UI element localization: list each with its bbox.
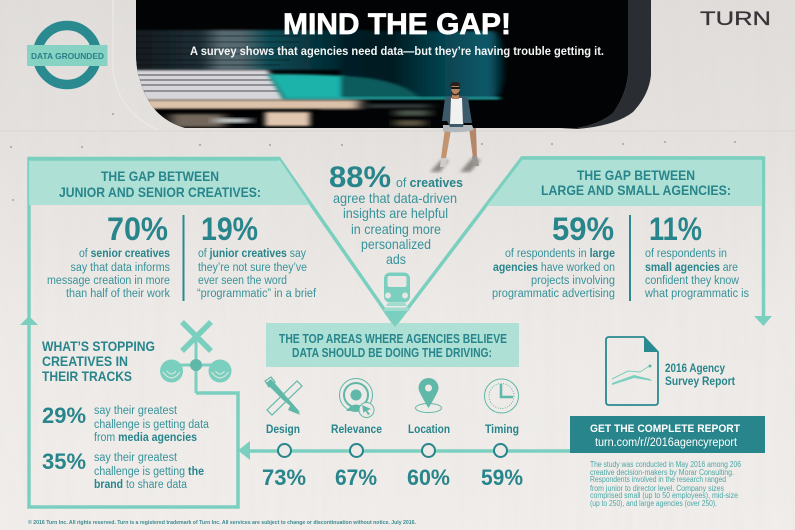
column: location 60%: Location (408, 424, 450, 436)
stat: 70% senior creatives (47, 211, 170, 300)
stat: 70% senior creatives: message creation in more (47, 275, 170, 287)
callout: 88% of creatives: insights are helpful (343, 205, 448, 221)
callout: get the complete report (570, 416, 765, 453)
panel heading (59, 168, 261, 200)
column: relevance 67%: 67% (335, 465, 377, 490)
panel heading: CREATIVES IN (42, 353, 128, 369)
logo: data grounded roundel (27, 26, 108, 84)
callout: 88% of creatives: personalized (361, 236, 431, 252)
stat: 35% the brand: say their greatest (94, 452, 178, 464)
panel heading: THE GAP BETWEEN (577, 167, 695, 183)
panel heading: THEIR TRACKS (42, 368, 132, 384)
callout: 88% of creatives: agree that data-driven (333, 190, 457, 206)
title: MIND THE GAP! (283, 8, 511, 41)
stat: 35% the brand (42, 449, 204, 491)
stat: 11% small agencies: of respondents in (645, 248, 727, 260)
panel heading: WHAT’S STOPPING (42, 338, 155, 354)
stat: 59% large agencies: 59% (552, 211, 614, 247)
subtitle: A survey shows that agencies need data—but they’re having trouble getting it. (190, 44, 604, 58)
stat: 11% small agencies: confident they know (645, 275, 740, 287)
stat: 19% junior creatives: they’re not sure they’ve (198, 262, 307, 274)
stat: 29% media agencies: say their greatest (94, 405, 178, 417)
stat: 35% the brand: brand to share data (94, 479, 188, 491)
column: design 73%: Design (266, 424, 300, 436)
stat: 19% junior creatives: of junior creatives say (198, 248, 306, 260)
callout: 88% of creatives (329, 161, 463, 267)
icon: railroad crossing signal (160, 322, 232, 393)
icon: train (383, 272, 410, 311)
photo: train passing through window (130, 0, 651, 130)
stat: 70% senior creatives: of senior creatives (79, 248, 170, 260)
stat: 59% large agencies (492, 211, 615, 300)
panel heading (541, 167, 731, 198)
callout: get the complete report: turn.com/r//2016agencyreport (595, 437, 738, 449)
stat: 59% large agencies: of respondents in large (505, 248, 615, 260)
stat: 35% the brand: 35% (42, 449, 86, 474)
panel heading (42, 338, 155, 384)
callout: get the complete report: GET THE COMPLETE REPORT (590, 423, 740, 435)
stat: 70% senior creatives: than half of their work (66, 288, 170, 300)
column: relevance 67% (331, 378, 382, 490)
study methodology note: The study was conducted in May 2016 among 206 (590, 460, 741, 469)
callout: 88% of creatives: in creating more (351, 221, 441, 237)
stat: 59% large agencies: programmatic advertising (492, 288, 615, 300)
stat: 19% junior creatives: ever seen the word (198, 275, 287, 287)
stat: 11% small agencies: what programmatic is (644, 288, 749, 300)
callout: 88% of creatives: ads (386, 251, 406, 267)
report label: 2016 Agency (665, 363, 726, 375)
stat: 70% senior creatives: 70% (107, 211, 168, 247)
roundel label: DATA GROUNDED (31, 51, 104, 61)
report label (665, 363, 735, 388)
panel: top areas heading: DATA SHOULD BE DOING THE DRIVING: (292, 346, 492, 360)
column: relevance 67%: Relevance (331, 424, 382, 436)
study methodology note: (up to 250), and large agencies (over 250). (590, 499, 717, 508)
panel: large and small agencies (492, 167, 749, 301)
man sitting on the ledge (430, 82, 481, 172)
column: design 73% (262, 377, 306, 490)
panel: top areas heading (266, 311, 519, 367)
stat: 59% large agencies: projects involving (531, 275, 615, 287)
column: timing 59%: 59% (481, 465, 523, 490)
footer copyright: © 2016 Turn Inc. All rights reserved. Turn is a registered trademark of Turn Inc. All services are subject to change or discontinuation without notice. July 2016. (28, 519, 417, 526)
stat: 11% small agencies (644, 211, 749, 300)
logo: Turn: TURN (700, 8, 771, 30)
stat: 29% media agencies (42, 403, 210, 444)
stat: 19% junior creatives: “programmatic” in a brief (197, 288, 317, 300)
report label: Survey Report (665, 376, 735, 388)
callout: 88% of creatives: of creatives (396, 175, 463, 190)
panel: junior and senior creatives (47, 168, 317, 301)
icon: clock (484, 379, 518, 413)
icon: pencil and ruler (265, 377, 302, 415)
stat: 29% media agencies: 29% (42, 403, 86, 428)
stat: 19% junior creatives (197, 211, 317, 300)
stat: 29% media agencies: from media agencies (94, 432, 197, 444)
stat: 29% media agencies: challenge is getting data (94, 419, 210, 431)
column: location 60%: 60% (407, 465, 450, 490)
study methodology note: Respondents involved in the research ranged (590, 475, 726, 484)
icon: map pin (416, 378, 442, 412)
study methodology note: from junior to director level. Company sizes (590, 484, 724, 493)
track line: route around the panels (20, 158, 772, 507)
stat: 70% senior creatives: say that data informs (70, 262, 170, 274)
icon: survey report document (606, 337, 658, 405)
column: timing 59% (481, 379, 523, 490)
icon: target with cursor (340, 378, 374, 418)
panel heading: LARGE AND SMALL AGENCIES: (541, 182, 731, 198)
panel heading: JUNIOR AND SENIOR CREATIVES: (59, 184, 261, 200)
stat: 11% small agencies: 11% (649, 211, 702, 247)
panel: what's stopping creatives (42, 338, 210, 491)
callout: 88% of creatives: 88% (329, 161, 391, 194)
stat: 35% the brand: challenge is getting the (94, 466, 204, 478)
stat: 19% junior creatives: 19% (201, 211, 258, 247)
study methodology note (590, 460, 741, 508)
stat: 59% large agencies: agencies have worked on (493, 262, 615, 274)
column: timing 59%: Timing (485, 424, 519, 436)
panel heading: THE GAP BETWEEN (101, 168, 219, 184)
study methodology note: comprised small (up to 50 employees), mid-size (590, 491, 738, 500)
study methodology note: creative decision-makers by Morar Consulting. (590, 468, 734, 477)
column: design 73%: 73% (262, 465, 306, 490)
panel: top areas heading: THE TOP AREAS WHERE AGENCIES BELIEVE (279, 332, 507, 346)
stat: 11% small agencies: small agencies are (645, 262, 738, 274)
column: location 60% (407, 378, 450, 490)
